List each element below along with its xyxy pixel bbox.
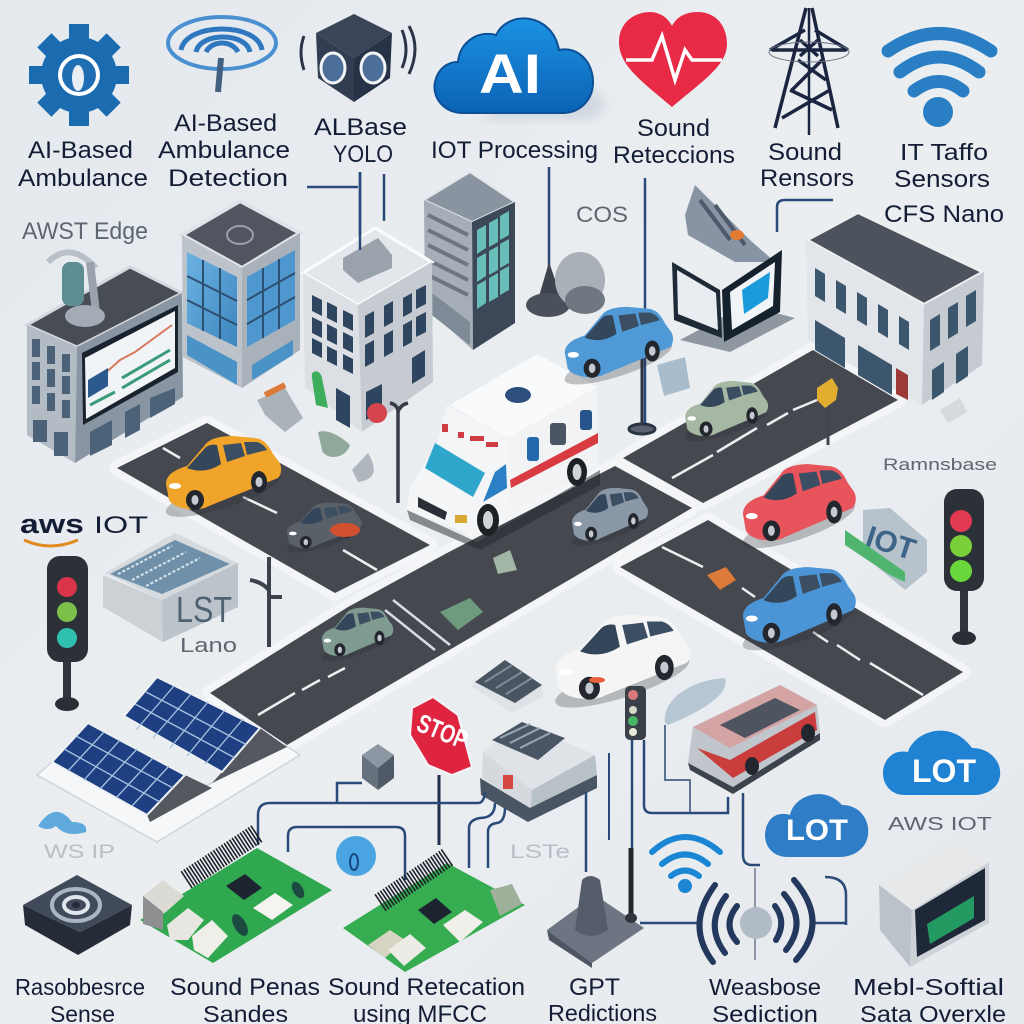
lamp post right — [629, 340, 655, 434]
label: faded WS IP: WS IP — [44, 842, 115, 863]
icon: AI cloud: AI — [479, 42, 541, 105]
lamp post center — [390, 403, 408, 503]
cloud: LOT upper — [883, 731, 1000, 795]
device: GPS pedestal — [547, 848, 644, 968]
traffic light: small — [625, 686, 646, 740]
label: AWS IOT logo: aws — [20, 509, 84, 539]
device: dark round sensor — [23, 875, 132, 955]
icon: gear — [29, 24, 129, 126]
car: blue lower — [739, 567, 859, 660]
top labels: AI-Based — [174, 110, 277, 137]
label: AWS IOT faded: AWS IOT — [888, 814, 992, 834]
device: server with screen — [879, 840, 989, 967]
stop sign — [410, 697, 472, 845]
top labels: YOLO — [333, 141, 393, 168]
icon: wifi small — [652, 837, 720, 893]
icon: heart with pulse — [619, 12, 727, 107]
raspberry pi board 1 — [140, 833, 332, 963]
building: white office — [303, 172, 433, 432]
car: blue upper — [561, 307, 676, 393]
icon: faded blue tag — [38, 812, 86, 834]
top labels: IT Taffo — [900, 139, 988, 165]
top labels: Ambulance — [18, 165, 148, 192]
top labels: IOT Processing — [431, 137, 598, 164]
ambulance — [407, 354, 600, 550]
top labels: Sensors — [894, 166, 990, 193]
connector wires bottom — [258, 725, 846, 960]
label: AWS IOT logo: IOT — [94, 512, 148, 539]
label: Lano: Lano — [180, 635, 237, 657]
top labels — [18, 110, 1004, 228]
icon: rooftop antenna — [48, 252, 105, 327]
top labels: Sound — [768, 139, 842, 166]
icon: red round marker — [367, 403, 387, 423]
icon: transmission tower — [769, 8, 849, 135]
car: green small — [682, 381, 770, 448]
road network — [117, 350, 963, 745]
car: blue grey small — [569, 488, 650, 553]
traffic light: right — [944, 489, 984, 645]
label: COS: COS — [576, 202, 628, 227]
cloud: LOT lower: LOT — [786, 814, 848, 847]
icon: blue round button — [336, 836, 376, 876]
building: left with screen — [27, 267, 183, 463]
road debris — [440, 357, 967, 630]
bottom labels: Weasbose — [709, 974, 821, 1000]
small dark module — [472, 660, 543, 713]
car: orange — [162, 436, 284, 526]
car: red — [739, 464, 859, 558]
building: right — [806, 212, 984, 405]
top labels: Ambulance — [158, 137, 290, 164]
car: dark small west — [284, 502, 364, 558]
top labels: Sound — [637, 115, 710, 142]
device: red machine — [665, 678, 820, 794]
cloud: LOT lower — [765, 794, 868, 857]
raspberry pi board 2 — [343, 857, 525, 972]
bottom labels: Sound Penas — [170, 974, 320, 1001]
bottom labels: Mebl-Softial — [853, 974, 1004, 1000]
scattered items near road left — [257, 385, 374, 482]
label: AWS IOT logo — [20, 509, 148, 546]
icon: AI cloud — [434, 18, 604, 120]
top labels: CFS Nano — [884, 201, 1004, 228]
top labels: Detection — [168, 165, 288, 192]
top labels: Rensors — [760, 165, 854, 192]
icon: sound waves — [699, 880, 813, 962]
icon: wifi large — [888, 34, 991, 127]
laptop with dashboard — [672, 250, 795, 352]
icon: sensor cube — [301, 14, 415, 102]
building: teal tower — [424, 172, 515, 350]
device: LST box: LST — [176, 589, 232, 630]
sign: orange road sign — [817, 378, 838, 445]
lamp post left — [250, 557, 282, 647]
label: AWST Edge: AWST Edge — [22, 218, 148, 245]
device: gray machine — [685, 185, 775, 262]
stop sign: STOP — [413, 708, 472, 755]
label: faded LSTe: LSTe — [510, 842, 570, 863]
IOT box sign — [845, 508, 927, 590]
small sensor near platform — [362, 744, 394, 790]
label: Ramnsbase: Ramnsbase — [883, 455, 997, 474]
bottom labels: Sound Retecation — [328, 974, 525, 1001]
traffic light: left — [47, 556, 88, 711]
top labels: Reteccions — [613, 142, 735, 169]
bottom labels: GPT — [569, 974, 620, 1001]
solar panel platform — [37, 677, 300, 842]
bottom labels — [15, 974, 1006, 1024]
cloud: LOT upper: LOT — [912, 753, 976, 789]
IOT box sign: IOT — [862, 520, 920, 567]
device: LST box — [103, 533, 238, 642]
icon: wireless dish — [168, 17, 276, 92]
building: blue glass — [182, 201, 300, 388]
device: gateway box — [480, 722, 597, 822]
car: grey green small — [319, 608, 395, 667]
device: roadside antenna unit — [526, 252, 605, 317]
top labels: ALBase — [314, 114, 407, 141]
connector wires top — [307, 167, 833, 430]
car: white — [550, 615, 694, 718]
bottom labels: Rasobbesrce — [15, 974, 145, 1000]
top labels: AI-Based — [28, 137, 133, 164]
